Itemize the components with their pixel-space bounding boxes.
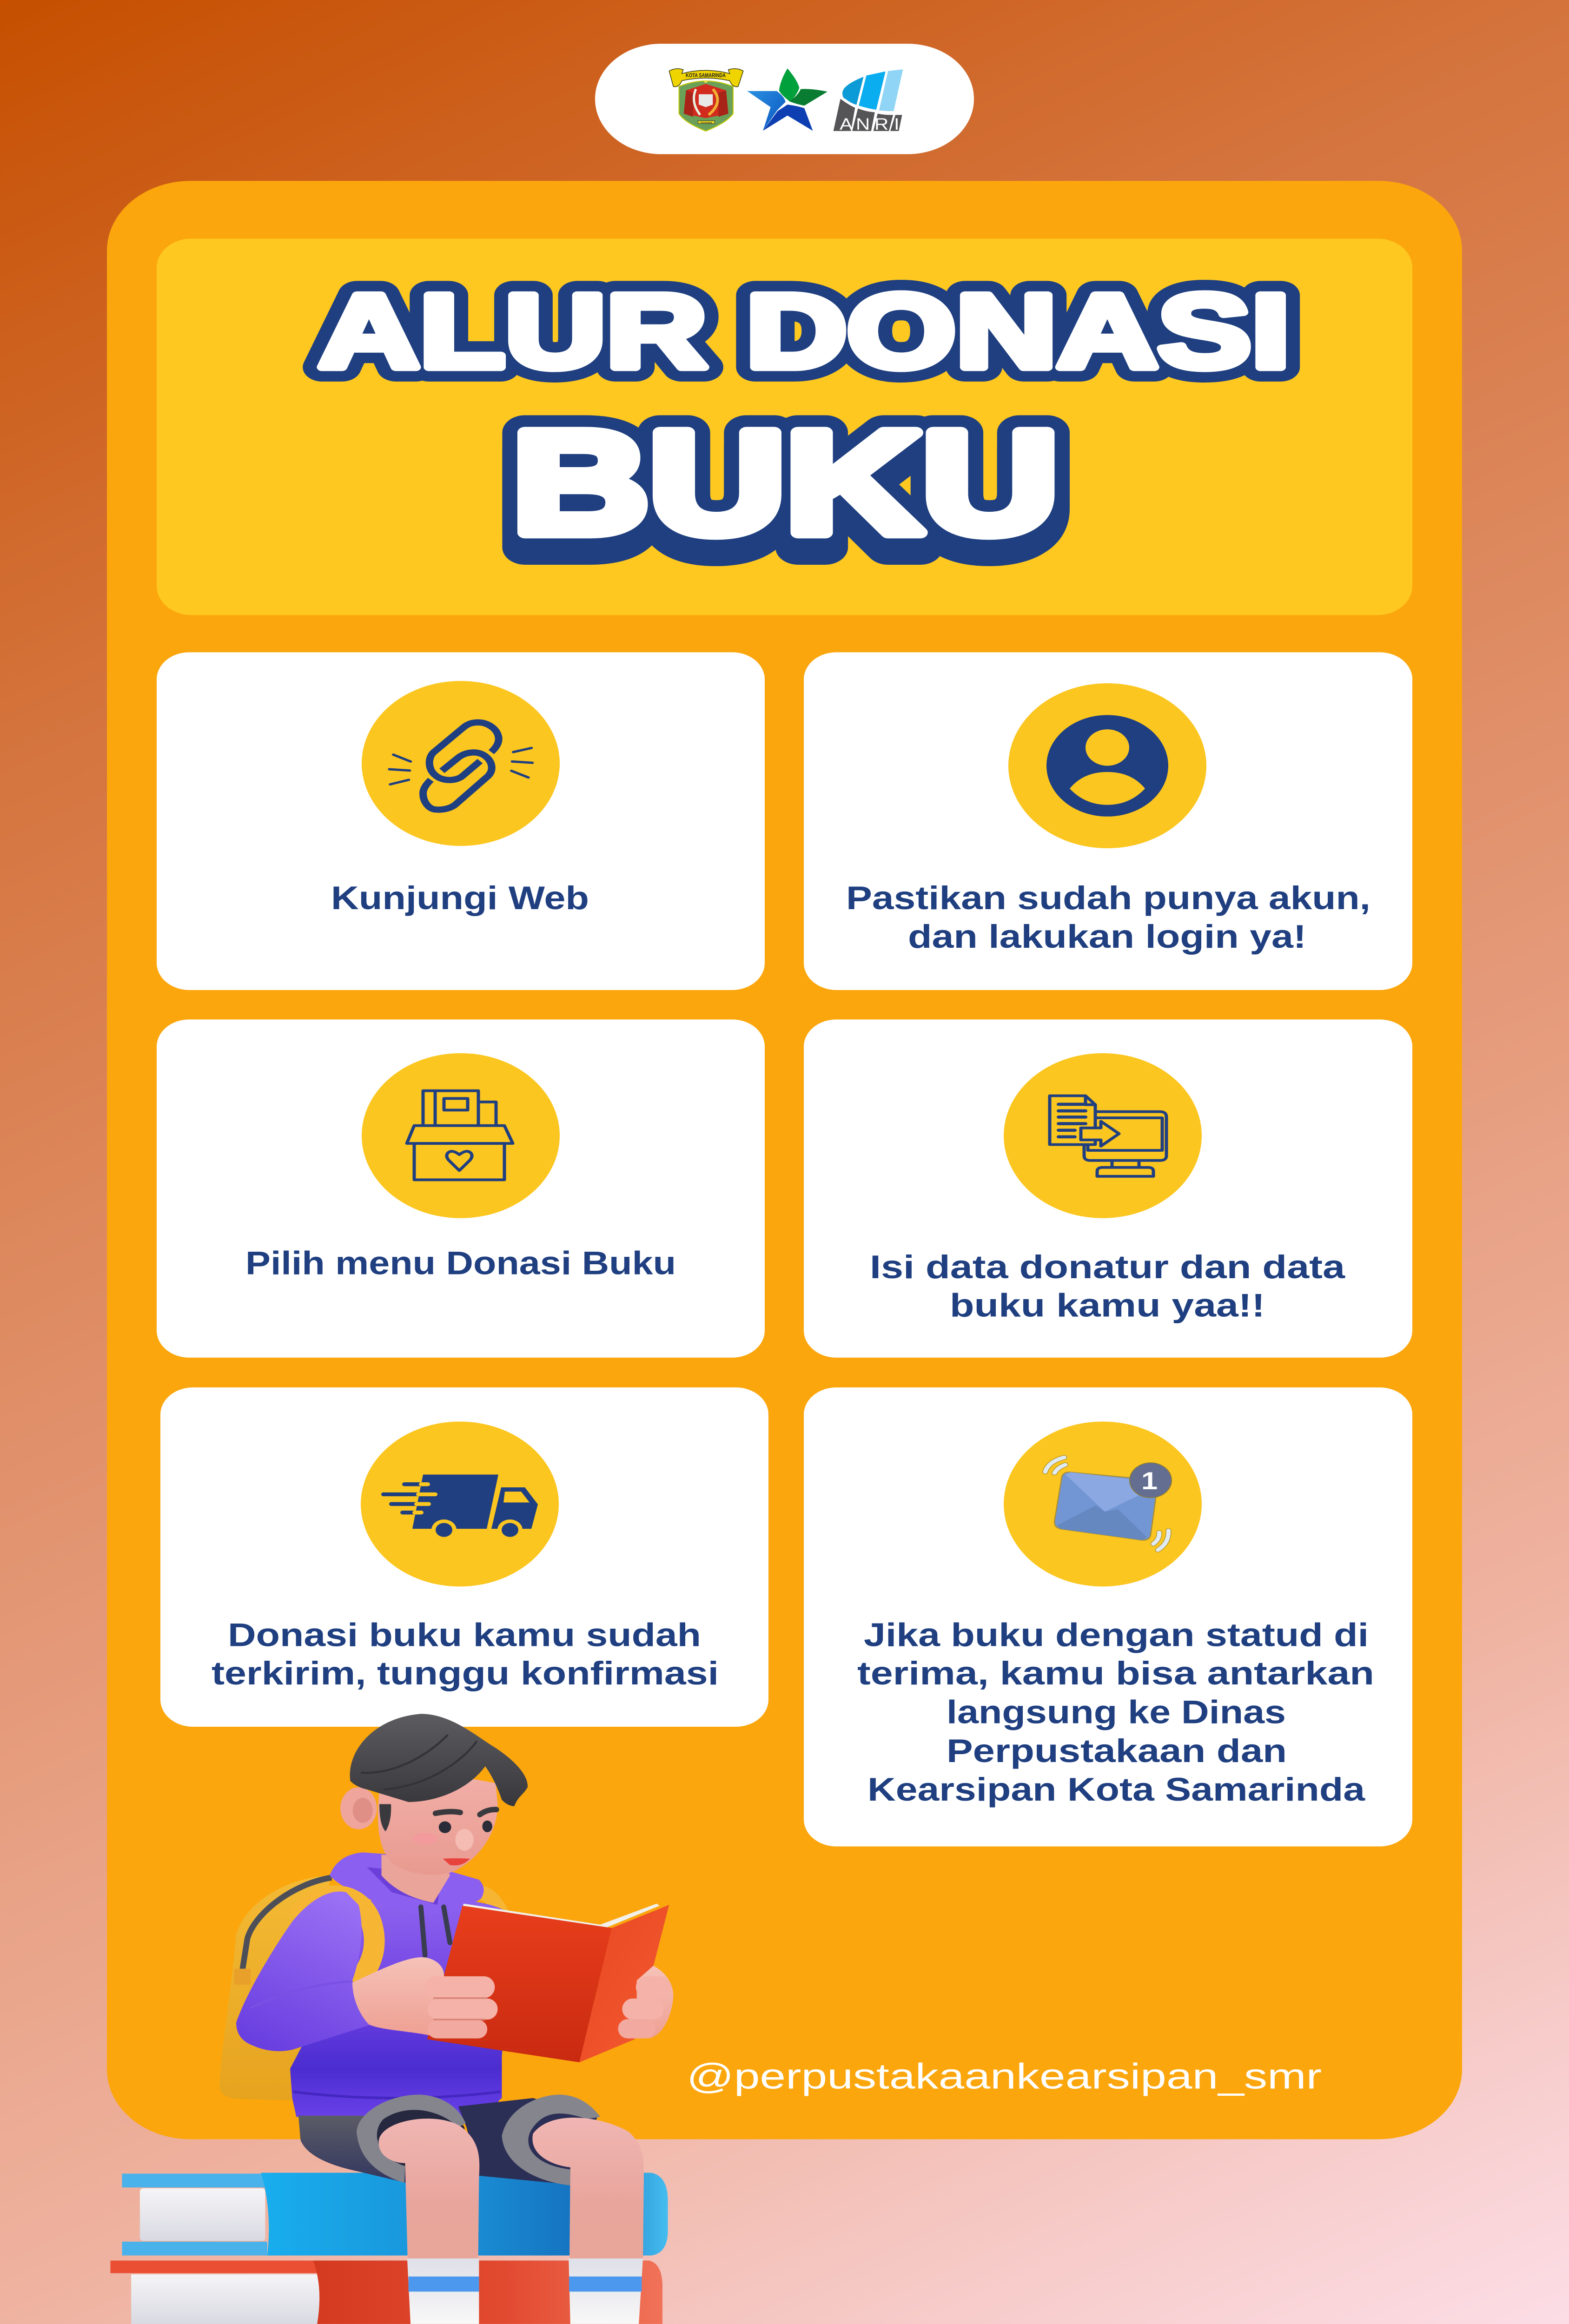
step 5 text: terkirim, tunggu konfirmasi	[212, 1655, 719, 1692]
logo pill	[595, 44, 974, 154]
card: step 6 antar buku	[804, 1387, 1412, 1846]
icon: document to monitor	[1004, 1053, 1202, 1218]
icon: envelope notification	[1004, 1421, 1202, 1586]
step 2 text: dan lakukan login ya!	[908, 918, 1306, 955]
step 1 text: Kunjungi Web	[331, 879, 589, 916]
step 6 text: Jika buku dengan statud di	[864, 1616, 1369, 1653]
logo: ANRI: ANRI	[840, 115, 900, 133]
illustration: boy reading on books	[110, 1714, 673, 2324]
social handle: @perpustakaankearsipan_smr	[687, 2056, 1322, 2096]
card: step 3 pilih menu	[157, 1019, 765, 1358]
card: step 4 isi data	[804, 1019, 1412, 1358]
step 6 text: terima, kamu bisa antarkan	[857, 1655, 1374, 1692]
step 4 text: Isi data donatur dan data	[870, 1248, 1345, 1285]
sleeve crease	[251, 1981, 351, 2008]
heading: buku: BUKU	[512, 416, 1059, 578]
left hand	[352, 1957, 498, 2039]
step 6 text: langsung ke Dinas	[947, 1693, 1286, 1730]
icon: user	[1008, 683, 1206, 848]
logo: kota samarinda shield: TEPIAN	[700, 121, 712, 125]
step 6 text	[857, 1616, 1374, 1808]
logo: kota samarinda shield	[669, 69, 743, 131]
step 5 text: Donasi buku kamu sudah	[228, 1616, 701, 1653]
card: step 5 donasi terkirim	[160, 1387, 768, 1727]
logo: star	[747, 68, 828, 131]
shorts	[298, 2095, 600, 2185]
logo: kota samarinda shield: KOTA SAMARINDA	[686, 72, 726, 79]
socks	[407, 2258, 643, 2324]
step 2 text: Pastikan sudah punya akun,	[846, 879, 1370, 916]
step 4 text: buku kamu yaa!!	[950, 1287, 1265, 1324]
right hand	[618, 1966, 673, 2039]
heading: alur donasi: ALUR DONASI	[318, 272, 1290, 390]
step 6 text: Perpustakaan dan	[947, 1732, 1287, 1769]
hood and neck	[330, 1852, 484, 1955]
step 3 text: Pilih menu Donasi Buku	[245, 1244, 676, 1281]
icon: delivery truck	[361, 1421, 559, 1586]
sleeve	[236, 1891, 371, 2051]
icon: donation box	[362, 1053, 560, 1218]
logo: ANRI	[834, 69, 903, 133]
head	[340, 1714, 528, 1875]
legs	[379, 2118, 644, 2260]
step 4 text	[870, 1248, 1345, 1324]
heading: buku: BUKU	[512, 402, 1059, 564]
main orange panel	[107, 181, 1462, 2139]
backpack strap	[296, 1896, 374, 1985]
step 5 text	[212, 1616, 719, 1692]
card: step 1 kunjungi web	[157, 652, 765, 990]
title panel	[157, 238, 1412, 615]
blue book	[122, 2173, 668, 2256]
step 2 text	[846, 879, 1370, 955]
icon: envelope notification: 1	[1141, 1467, 1158, 1495]
heading: alur donasi: ALUR DONASI	[318, 272, 1290, 390]
icon: chain link	[362, 681, 560, 846]
red book	[110, 2260, 662, 2324]
card: step 2 akun dan login	[804, 652, 1412, 990]
hoodie	[290, 1892, 514, 2117]
backpack	[219, 1875, 331, 2100]
open red book	[427, 1904, 669, 2062]
step 6 text: Kearsipan Kota Samarinda	[867, 1771, 1365, 1808]
heading: buku: BUKU	[512, 402, 1059, 564]
